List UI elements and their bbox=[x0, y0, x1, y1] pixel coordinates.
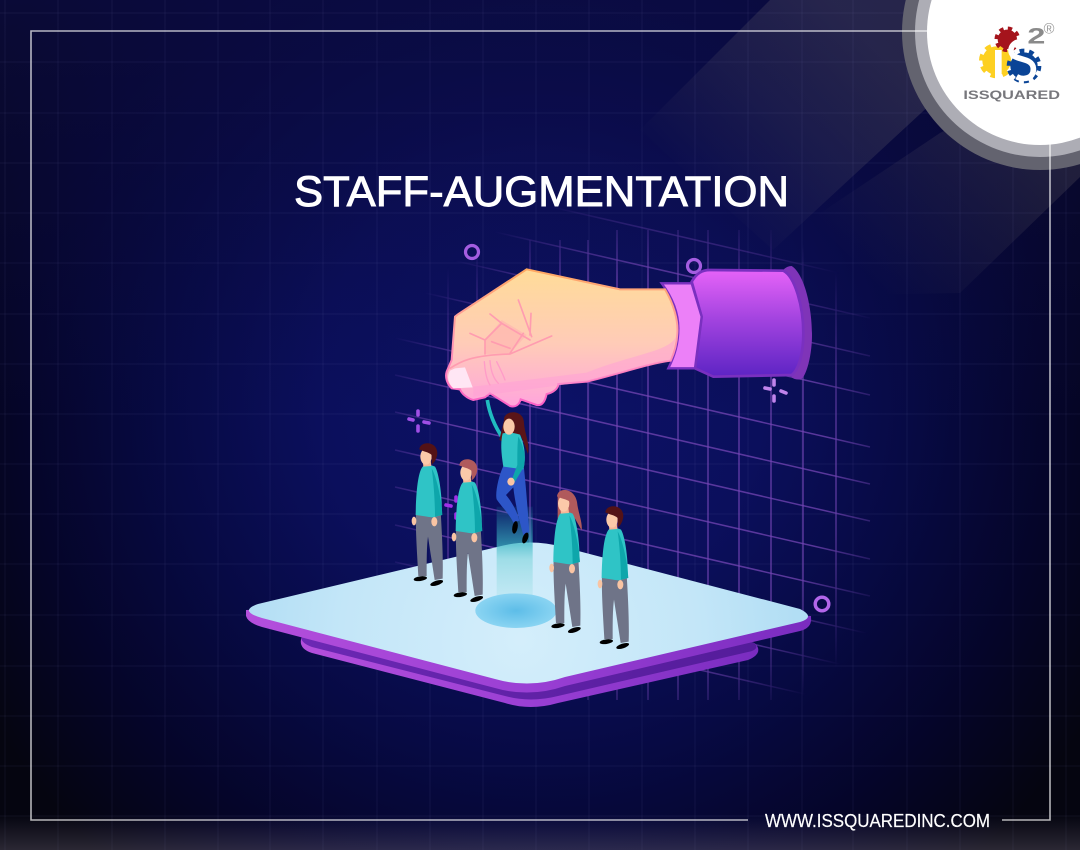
website url: WWW.ISSQUAREDINC.COM bbox=[765, 811, 990, 831]
yellow gear bbox=[981, 45, 1012, 76]
platform bbox=[246, 542, 811, 707]
S curve bbox=[1011, 42, 1033, 78]
figure 1 bbox=[412, 443, 444, 587]
figure 4: woman bbox=[549, 490, 582, 634]
upper plate top bbox=[249, 542, 808, 684]
perspective grid bbox=[395, 171, 870, 709]
glowing floor circle bbox=[475, 593, 557, 628]
cuff bbox=[662, 283, 702, 368]
blue gear bbox=[1009, 51, 1039, 81]
sparkle: behind second figure bbox=[446, 497, 456, 518]
wordmark: ISSQUARED bbox=[963, 88, 1060, 102]
title: STAFF-AUGMENTATION bbox=[294, 168, 789, 216]
logo badge rings bbox=[902, 0, 1080, 170]
superscript 2: 2 bbox=[1027, 23, 1045, 48]
lower plate bbox=[301, 636, 758, 707]
sleeve bbox=[692, 266, 812, 379]
decorative ring: above sleeve bbox=[688, 260, 700, 272]
figure 3: lifted woman bbox=[487, 400, 530, 544]
figure 2 bbox=[452, 459, 484, 603]
figures and beam bbox=[412, 400, 630, 650]
red gear bbox=[996, 28, 1018, 50]
sparkle: left of figures bbox=[409, 411, 429, 431]
decorative ring: top left of hand bbox=[466, 246, 478, 258]
I bar bbox=[995, 50, 1002, 81]
fist bbox=[446, 269, 677, 406]
giant hand bbox=[446, 266, 812, 406]
light beam bbox=[497, 507, 533, 602]
upper plate edge bbox=[246, 600, 811, 693]
figure 5 bbox=[598, 506, 630, 650]
registered mark: ® bbox=[1044, 22, 1055, 38]
sparkle: right under sleeve bbox=[765, 380, 786, 401]
ISSQUARED logo mark bbox=[963, 22, 1060, 102]
decorative ring: right of platform bbox=[815, 597, 829, 611]
logo badge bbox=[927, 0, 1080, 145]
